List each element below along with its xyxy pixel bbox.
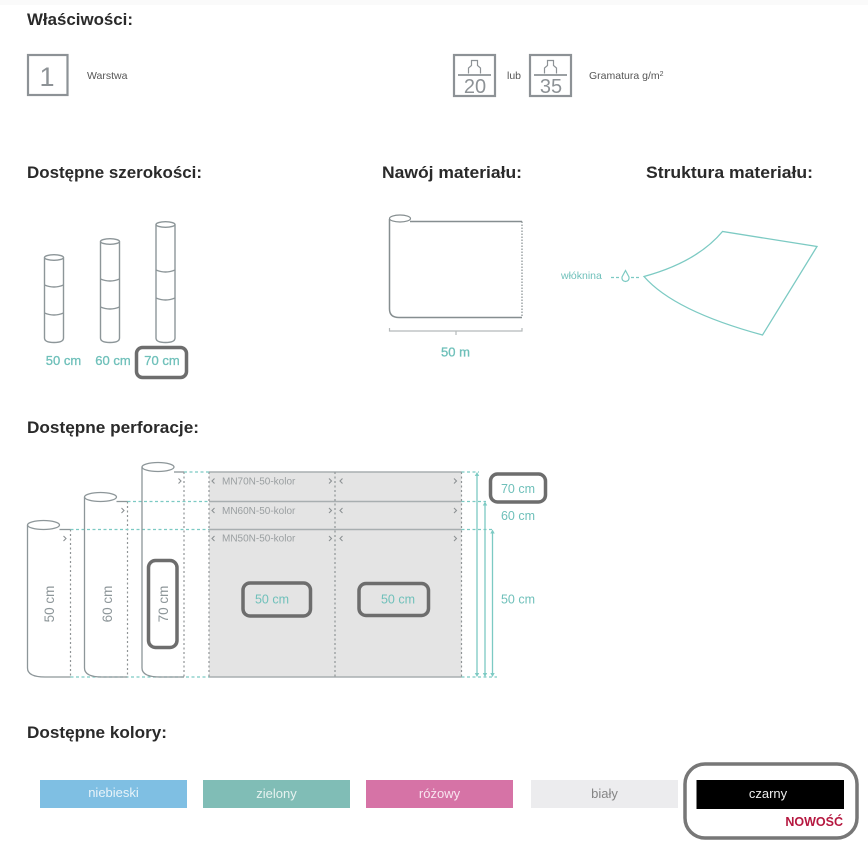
swatch: różowy: różowy [419,786,461,801]
chart: perforations: 60 cm [100,586,115,622]
label: 50 cm dimension: 50 cm [501,592,535,606]
grey sheet [209,472,462,677]
dimension arrows [475,472,495,677]
label: włóknina: włóknina [560,270,602,282]
roll 70 cm [156,222,175,342]
chart: perforations: MN60N-50-kolor [222,506,296,517]
roll 70 cm [142,462,184,677]
highlight: left 50 cm [243,583,310,616]
label: 50 cm: 50 cm [46,353,81,368]
highlight: left 50 cm: 50 cm [255,592,289,606]
icon: 1 layer [28,55,68,95]
roll 60 cm [100,239,120,342]
teal dashed guides [70,472,497,677]
icon: weight 20 [454,55,495,98]
swatch: czarny [696,780,844,809]
product codes: MN70N-50-kolor [222,476,296,488]
label: 60 cm: 60 cm [95,353,131,368]
label: 50 m: 50 m [441,344,470,360]
icon: weight 35: 35 [540,76,562,98]
roll labels: 50 cm [42,586,57,622]
icon: fibre droplet pointer [611,270,641,282]
swatch: biały: biały [591,786,618,801]
highlight: 70 cm vertical [148,560,177,648]
heading: Struktura materiału: Struktura materiału: [646,164,813,182]
swatch: różowy [366,780,513,808]
highlight: 70 cm dimension: 70 cm [501,482,535,496]
roll 50 cm [44,255,64,342]
highlight: 70 cm: 70 cm [144,353,180,368]
roll 60 cm [84,492,128,677]
heading: Dostępne perforacje: Dostępne perforacje: [27,419,199,437]
label: lub: lub [507,70,521,82]
roll 50 cm [28,520,70,677]
swatch: niebieski [40,780,187,808]
icon: weight 20: 20 [464,76,486,98]
heading: Właściwości: Właściwości: [27,11,133,29]
swatch: niebieski: niebieski [88,785,139,800]
icon: fabric structure [644,232,817,335]
chevrons [64,478,456,541]
icon: 1 layer: 1 [39,62,55,92]
label: Gramatura: 2 [660,71,664,78]
icon: weight 35 [530,55,571,98]
chart: roll widths [44,222,175,342]
highlight: czarny swatch [685,764,857,838]
chart: perforations [28,462,546,677]
label: Gramatura: Gramatura g/m [589,70,660,82]
swatch: zielony: zielony [256,786,297,801]
swatch: zielony [203,780,350,808]
highlight: 70 cm [136,348,186,378]
label: 60 cm dimension: 60 cm [501,509,535,523]
highlight: right 50 cm [359,584,428,616]
icon: material roll [390,215,522,335]
highlight: czarny swatch: czarny [749,786,788,801]
heading: Nawój materiału: Nawój materiału: [382,164,522,182]
highlight: 70 cm dimension [490,474,546,502]
highlight: right 50 cm: 50 cm [381,592,415,606]
swatch: biały [531,780,678,808]
label: NOWOŚĆ: NOWOŚĆ [785,814,843,829]
heading: Dostępne kolory: Dostępne kolory: [27,724,167,742]
highlight: 70 cm vertical: 70 cm [156,586,171,622]
label: Warstwa: Warstwa [87,70,128,82]
chart: perforations: MN50N-50-kolor [222,534,296,544]
heading: Dostępne szerokości: Dostępne szerokości: [27,164,202,182]
